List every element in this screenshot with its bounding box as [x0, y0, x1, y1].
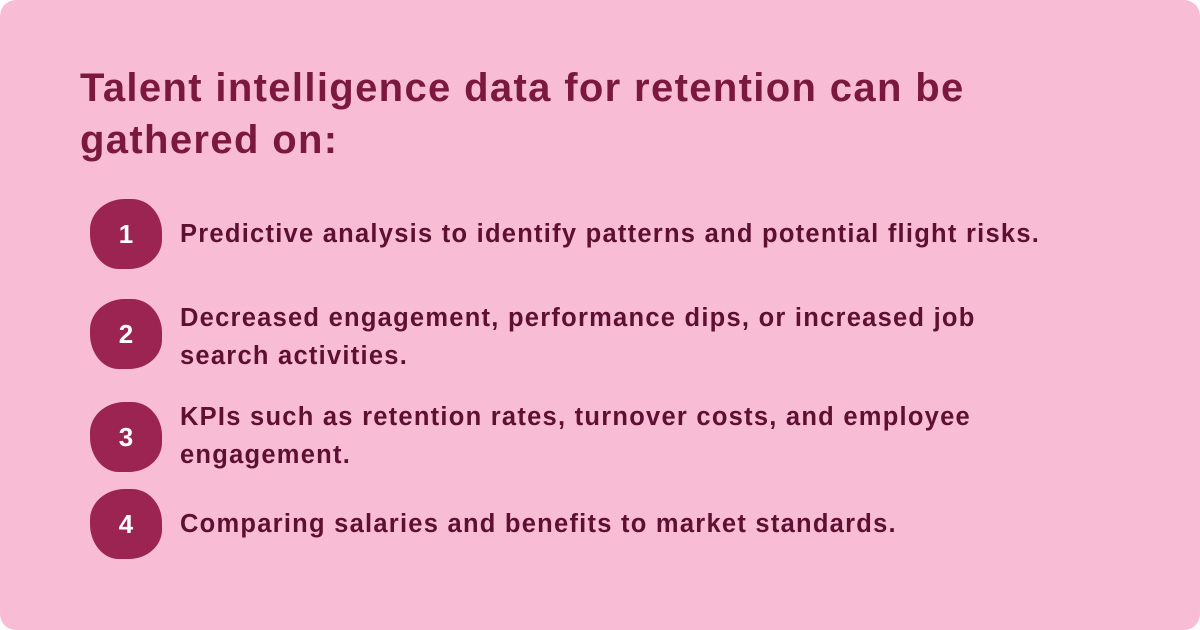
text: item 2: Decreased engagement, performance dips, or increased job search activities.: [180, 304, 976, 370]
text: item 4: Comparing salaries and benefits to market standards.: [180, 510, 897, 538]
item 4: [90, 489, 897, 559]
item 2: [90, 299, 976, 370]
icon: number 3 blob: 3: [119, 422, 133, 452]
icon: number 4 blob: [90, 489, 162, 559]
text: item 1: Predictive analysis to identify patterns and potential flight risks.: [180, 220, 1040, 248]
title: Talent intelligence data for retention can be gathered on:: [80, 66, 965, 162]
item 1: [90, 199, 1040, 269]
icon: number 2 blob: [90, 299, 162, 369]
icon: number 4 blob: 4: [119, 508, 133, 538]
icon: number 3 blob: [90, 402, 162, 472]
item 3: [90, 402, 971, 472]
icon: number 1 blob: 1: [119, 218, 133, 248]
text: item 3: KPIs such as retention rates, turnover costs, and employee engagement.: [180, 403, 971, 469]
icon: number 1 blob: [90, 199, 162, 269]
icon: number 2 blob: 2: [119, 318, 133, 348]
